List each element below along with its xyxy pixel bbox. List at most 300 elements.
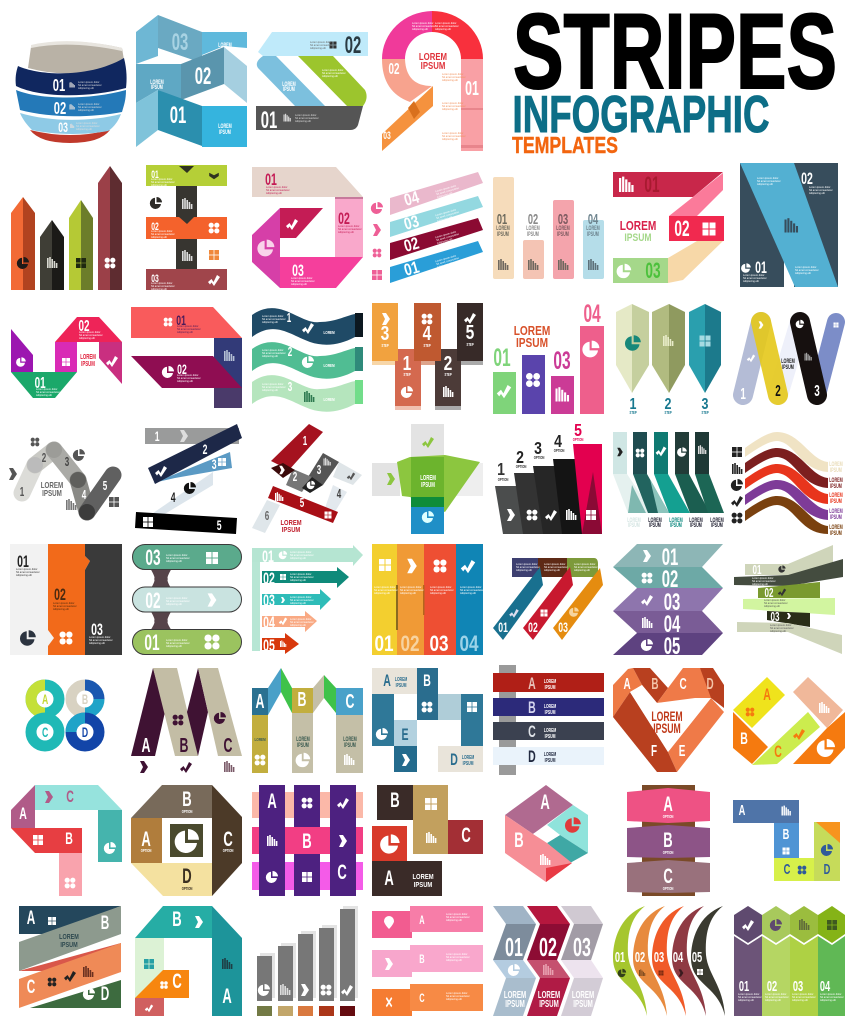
- panel: blue block path: B: [423, 670, 431, 690]
- panel: M stripes: A: [142, 734, 150, 757]
- panel: I-shaped stack: 01: [151, 168, 159, 180]
- panel: orange square ribbon: [733, 677, 845, 765]
- panel: five arrows: 02: [263, 568, 275, 588]
- panel: zigzag capsules: 1: [20, 485, 24, 500]
- panel: M stripes: C: [224, 734, 232, 757]
- panel: folded blue stripes: IPSUM: [151, 84, 163, 91]
- panel: blue block path: E: [401, 724, 409, 744]
- panel: diagonal ABCD bands: LOREM: [59, 933, 79, 941]
- panel: pink origami ring: 02: [338, 208, 350, 228]
- panel: octagon: C: [223, 827, 233, 851]
- panel: folded blue stripes: LOREM: [218, 42, 232, 49]
- panel: three diagonal tabs: 02: [528, 620, 538, 636]
- panel: five arrows: 03: [263, 590, 275, 610]
- panel: zigzag number columns: LOREM: [504, 988, 526, 1000]
- panel: Z ribbon: IPSUM: [624, 232, 652, 244]
- panel: three waves: [252, 308, 363, 412]
- panel: folded blue stripes: 03: [172, 30, 188, 56]
- panel: four colour columns: 04: [459, 632, 479, 657]
- panel: zigzag number columns: 03: [573, 932, 591, 962]
- panel: rounded sticks: 2: [775, 382, 781, 400]
- panel: crimson diagonal blocks: LOREM: [280, 519, 302, 527]
- panel: black steps with crimson: 5: [574, 420, 582, 440]
- panel: five arrows: 01: [262, 546, 274, 566]
- panel: zigzag capsules: [9, 438, 119, 520]
- panel: three shields: STEP: [629, 410, 637, 415]
- panel: folded blue stripes: [136, 15, 247, 147]
- panel: pink tab banners: B: [419, 953, 425, 967]
- panel: five crescents: [613, 906, 725, 1016]
- panel: three shields: STEP: [664, 410, 672, 415]
- panel: three shields: 2: [665, 396, 671, 413]
- panel: three shields: 3: [702, 396, 708, 413]
- panel: blue and lime step blocks: D: [824, 861, 830, 878]
- panel: crimson diagonal blocks: 3: [317, 463, 321, 478]
- panel: four colour columns: 03: [429, 632, 449, 657]
- panel: pink tab banners: A: [419, 914, 425, 928]
- panel: lorem column chart: 01: [493, 344, 511, 372]
- panel: rounded sticks: IPSUM: [782, 364, 794, 371]
- panel: four labelled banners: D: [528, 746, 536, 766]
- title: TEMPLATES: [512, 132, 618, 158]
- panel: striped bowl: 01: [53, 75, 65, 96]
- panel: four labelled banners: [493, 665, 604, 775]
- title: [512, 0, 837, 158]
- panel: teal flowing columns: IPSUM: [670, 522, 682, 529]
- panel: hexagon topped columns: [734, 906, 845, 1016]
- panel: octagon: D: [182, 864, 192, 888]
- panel: black steps with crimson: OPTION: [573, 437, 584, 442]
- panel: origami heart: C: [680, 675, 687, 693]
- panel: U ribbon: 01: [35, 374, 46, 392]
- panel: teal flowing columns: LOREM: [710, 517, 724, 524]
- panel: zigzag capsules: 3: [65, 455, 69, 470]
- panel: pastel bars: LOREM: [556, 225, 570, 232]
- panel: zigzag capsules: IPSUM: [42, 489, 62, 498]
- panel: stacked pink banners: A: [663, 792, 673, 816]
- panel: black steps with crimson: 3: [534, 438, 542, 458]
- panel: five arrows: 05: [263, 635, 275, 655]
- panel: zigzag number columns: 01: [505, 932, 523, 962]
- panel: tan and dark blocks: A: [384, 866, 394, 890]
- panel: number nine ring: [382, 11, 483, 151]
- panel: five crescents: 05: [692, 949, 702, 966]
- panel: black steps with crimson: OPTION: [534, 455, 545, 460]
- panel: overlapping step columns: STEP: [423, 343, 431, 348]
- panel: three waves: 3: [288, 380, 292, 395]
- panel: five arched ribbons: LOREM: [829, 492, 843, 499]
- panel: zigzag number columns: IPSUM: [505, 997, 525, 1009]
- panel: three shields: [616, 304, 721, 415]
- panel: five arrows: 04: [263, 612, 275, 632]
- panel: zigzag number columns: LOREM: [572, 988, 594, 1000]
- panel: rounded sticks: LOREM: [781, 358, 795, 365]
- panel: woven stripes: C: [337, 860, 347, 884]
- panel: pastel bars: 01: [497, 211, 507, 228]
- panel: fanned strips: 02: [765, 586, 773, 601]
- panel: three diagonal tabs: [493, 558, 603, 640]
- panel: slanted navy strips: 2: [203, 442, 207, 458]
- panel: Z ribbon: 02: [674, 216, 690, 241]
- panel: tan and dark blocks: LOREM: [412, 873, 434, 881]
- panel: three waves: 2: [288, 345, 292, 360]
- panel: three diagonal tabs: 03: [558, 620, 568, 636]
- panel: rounded sticks: 1: [740, 385, 746, 403]
- panel: lorem column chart: [493, 300, 604, 414]
- panel: S ribbon: [256, 32, 368, 134]
- panel: pink origami ring: [252, 167, 363, 288]
- panel: four labelled banners: IPSUM: [545, 709, 556, 715]
- panel: blue block path: IPSUM: [396, 682, 407, 688]
- panel: teal flowing columns: LOREM: [669, 517, 683, 524]
- panel: four colour columns: 02: [400, 632, 420, 657]
- panel: teal ribbon with orange: B: [172, 907, 182, 931]
- panel: five arched ribbons: LOREM: [829, 477, 843, 484]
- panel: four labelled banners: LOREM: [544, 751, 556, 757]
- panel: five crescents: 04: [673, 949, 683, 966]
- panel: five chevron rows: 01: [662, 545, 678, 571]
- panel: stacked pink banners: OPTION: [663, 814, 674, 819]
- panel: pastel bars: IPSUM: [557, 231, 569, 238]
- panel: octagon: OPTION: [141, 848, 152, 853]
- panel: green polygon over cross: IPSUM: [421, 482, 435, 489]
- panel: pink tab banners: C: [419, 992, 425, 1006]
- panel: five arched ribbons: IPSUM: [830, 514, 842, 521]
- panel: number nine ring: IPSUM: [421, 60, 445, 71]
- panel: N ribbon: 02: [801, 168, 813, 188]
- panel: three tone columns: 03: [91, 619, 103, 639]
- panel: teal flowing columns: LOREM: [689, 517, 703, 524]
- panel: pastel bars: IPSUM: [527, 231, 539, 238]
- panel: pastel bars: IPSUM: [587, 231, 599, 238]
- panel: U ribbon: IPSUM: [81, 361, 95, 368]
- panel: diagonal numbered bands: 04: [402, 188, 422, 210]
- panel: diagonal numbered bands: 02: [402, 234, 421, 256]
- panel: pastel bars: LOREM: [496, 225, 510, 232]
- panel: pink tab banners: [372, 906, 483, 1016]
- panel: M stripes: [131, 668, 242, 773]
- panel: number nine ring: 03: [383, 129, 391, 141]
- panel: origami heart: E: [679, 742, 685, 760]
- panel: pink tab banners: ✕: [385, 994, 393, 1012]
- panel: pastel bars: 03: [558, 211, 568, 228]
- panel: black steps with crimson: OPTION: [516, 464, 527, 469]
- panel: three shields: 1: [630, 396, 636, 413]
- panel: number nine ring: 01: [465, 77, 479, 100]
- panel: pastel bars: 02: [528, 211, 538, 228]
- panel: five chevron rows: [613, 544, 723, 660]
- panel: zigzag number columns: IPSUM: [573, 997, 593, 1009]
- panel: five arched ribbons: IPSUM: [830, 530, 842, 537]
- panel: origami heart: [613, 668, 724, 772]
- panel: zigzag ABC columns: LOREM: [343, 736, 357, 743]
- panel: crimson diagonal blocks: 5: [300, 496, 304, 511]
- panel: coral and maroon ribbon: 01: [176, 313, 186, 329]
- panel: rounded sticks: 3: [814, 382, 820, 400]
- panel: Z ribbon: LOREM: [620, 219, 656, 233]
- panel: five arched ribbons: LOREM: [829, 524, 843, 531]
- panel: tan and dark blocks: IPSUM: [414, 881, 433, 889]
- panel: crimson diagonal blocks: 1: [303, 434, 307, 449]
- panel: overlapping step columns: [372, 303, 483, 410]
- panel: four labelled banners: LOREM: [544, 703, 556, 709]
- panel: overlapping step columns: 3: [381, 322, 389, 344]
- panel: five crescents: 03: [654, 949, 664, 966]
- panel: lorem column chart: 04: [583, 300, 601, 328]
- panel: green polygon over cross: [372, 424, 483, 534]
- panel: stacked pink banners: B: [663, 828, 673, 852]
- panel: pastel bars: IPSUM: [497, 231, 509, 238]
- panel: slanted navy strips: 4: [171, 490, 176, 506]
- panel: three waves: LOREM: [324, 362, 335, 368]
- panel: four rings: B: [82, 692, 88, 708]
- panel: fanned strips: 03: [771, 610, 779, 625]
- panel: blue block path: A: [383, 670, 391, 690]
- panel: folded blue stripes: 02: [195, 64, 211, 90]
- panel: zigzag capsules: LOREM: [41, 481, 63, 490]
- panel: diagonal ABCD bands: A: [27, 908, 35, 929]
- panel: black steps with crimson: 2: [516, 447, 524, 467]
- panel: teal ribbon with orange: [135, 906, 242, 1016]
- panel: U ribbon: 02: [78, 317, 90, 335]
- panel: M stripes: B: [180, 734, 188, 757]
- panel: octagon: OPTION: [182, 809, 193, 814]
- panel: crimson diagonal blocks: IPSUM: [282, 526, 301, 534]
- panel: four labelled banners: IPSUM: [545, 757, 556, 763]
- panel: three waves: 1: [287, 311, 291, 326]
- panel: four labelled banners: A: [528, 673, 536, 693]
- panel: tan and dark blocks: [372, 785, 483, 896]
- panel: connected pills: 01: [144, 630, 160, 655]
- panel: slanted navy strips: 5: [217, 518, 222, 534]
- panel: teal flowing columns: LOREM: [627, 517, 641, 524]
- panel: overlapping step columns: 4: [423, 322, 431, 344]
- panel: zigzag ABC columns: LOREM: [255, 736, 266, 742]
- panel: four labelled banners: LOREM: [544, 727, 556, 733]
- panel: stacked pink banners: OPTION: [663, 886, 674, 891]
- panel: blue block path: [372, 668, 483, 772]
- panel: four colour columns: [372, 544, 484, 657]
- panel: three tone columns: 02: [54, 584, 66, 604]
- panel: mauve cyan ribbon: B: [65, 828, 73, 848]
- panel: overlapping step columns: 1: [403, 352, 411, 374]
- panel: orange square ribbon: B: [740, 728, 748, 748]
- panel: mauve cyan ribbon: A: [19, 803, 27, 823]
- panel: zigzag number columns: [493, 906, 603, 1016]
- panel: zigzag ABC columns: C: [346, 690, 354, 713]
- panel: zigzag ABC columns: IPSUM: [297, 742, 309, 749]
- panel: crimson diagonal blocks: 4: [337, 487, 341, 502]
- panel: woven stripes: B: [302, 829, 312, 853]
- panel: overlapping step columns: STEP: [403, 372, 411, 377]
- panel: octagon: [131, 785, 242, 896]
- panel: mauve cyan ribbon: [11, 785, 122, 896]
- panel: hexagon topped columns: 04: [820, 978, 830, 995]
- panel: folded blue stripes: 01: [170, 103, 186, 129]
- panel: connected pills: 02: [145, 588, 161, 613]
- panel: I-shaped stack: 02: [151, 220, 159, 232]
- panel: five arched ribbons: IPSUM: [830, 467, 842, 474]
- panel: blue and lime step blocks: A: [739, 802, 745, 819]
- panel: four labelled banners: B: [528, 697, 536, 717]
- panel: hexagon topped columns: 02: [767, 978, 777, 995]
- panel: fanned strips: [734, 545, 843, 654]
- panel: pink origami ring: 01: [265, 169, 277, 189]
- panel: five arched ribbons: IPSUM: [830, 483, 842, 490]
- panel: N ribbon: [740, 163, 838, 287]
- panel: black steps with crimson: [495, 420, 602, 534]
- panel: hexagon: A: [540, 790, 550, 814]
- panel: blue block path: LOREM: [462, 754, 474, 760]
- panel: crimson diagonal blocks: 6: [265, 509, 269, 524]
- panel: diagonal ABCD bands: C: [27, 977, 35, 998]
- panel: overlapping step columns: STEP: [466, 342, 474, 347]
- panel: diagonal numbered bands: 03: [402, 212, 421, 234]
- panel: black steps with crimson: OPTION: [498, 477, 509, 482]
- panel: woven stripes: [252, 785, 363, 896]
- panel: octagon: OPTION: [182, 886, 193, 891]
- panel: five arched ribbons: LOREM: [829, 461, 843, 468]
- panel: S ribbon: 01: [261, 108, 277, 134]
- panel: striped bowl: 02: [54, 98, 66, 119]
- panel: teal flowing columns: IPSUM: [711, 522, 723, 529]
- panel: woven stripes: A: [267, 789, 277, 813]
- panel: origami heart: D: [707, 675, 714, 693]
- panel: teal flowing columns: IPSUM: [690, 522, 702, 529]
- panel: five arched ribbons: [731, 432, 843, 537]
- panel: three diagonal tabs: 01: [498, 620, 508, 636]
- panel: four colour columns: 01: [374, 632, 394, 657]
- panel: folded blue stripes: IPSUM: [219, 129, 231, 136]
- panel: origami heart: A: [624, 675, 631, 693]
- panel: diagonal ABCD bands: [19, 906, 121, 1008]
- panel: coral and maroon ribbon: 02: [177, 362, 187, 378]
- panel: arrow columns: [11, 166, 122, 290]
- panel: blue and lime step blocks: B: [783, 826, 789, 843]
- panel: five arched ribbons: IPSUM: [830, 498, 842, 505]
- panel: five chevron rows: 04: [664, 612, 680, 638]
- panel: origami heart: B: [651, 675, 659, 693]
- panel: S ribbon: LOREM: [282, 81, 296, 88]
- panel: origami heart: LOREM: [651, 709, 683, 725]
- panel: pastel bars: LOREM: [526, 225, 540, 232]
- panel: zigzag capsules: 4: [82, 488, 86, 503]
- panel: diagonal ABCD bands: IPSUM: [60, 941, 78, 949]
- panel: N ribbon: 01: [755, 257, 767, 277]
- panel: zigzag ABC columns: IPSUM: [344, 742, 356, 749]
- panel: zigzag ABC columns: [252, 668, 363, 773]
- panel: five chevron rows: 02: [662, 567, 678, 593]
- panel: tan and dark blocks: B: [390, 788, 400, 812]
- panel: rounded sticks: [740, 320, 838, 403]
- panel: three waves: LOREM: [324, 396, 335, 402]
- panel: number nine ring: LOREM: [419, 51, 447, 62]
- panel: S ribbon: IPSUM: [283, 86, 295, 93]
- panel: blue block path: LOREM: [395, 676, 407, 682]
- panel: lorem column chart: IPSUM: [516, 336, 548, 350]
- panel: four labelled banners: LOREM: [544, 678, 556, 684]
- panel: four rings: C: [42, 725, 49, 741]
- panel: four rings: D: [82, 725, 88, 741]
- panel: zigzag ABC columns: LOREM: [296, 736, 310, 743]
- panel: black steps with crimson: OPTION: [554, 448, 565, 453]
- panel: four labelled banners: IPSUM: [545, 733, 556, 739]
- panel: zigzag capsules: 5: [103, 479, 107, 494]
- panel: hexagon topped columns: 01: [739, 978, 749, 995]
- panel: octagon: B: [182, 787, 192, 811]
- panel: slanted navy strips: 3: [212, 457, 217, 473]
- panel: zigzag number columns: 02: [539, 932, 557, 962]
- panel: connected pills: 03: [145, 545, 161, 570]
- panel: four rings: [31, 685, 99, 746]
- panel: folded blue stripes: LOREM: [218, 123, 232, 130]
- panel: I-shaped stack: 03: [151, 272, 159, 284]
- panel: tan and dark blocks: C: [461, 823, 471, 847]
- panel: U ribbon: [11, 317, 122, 398]
- panel: zigzag number columns: IPSUM: [539, 997, 559, 1009]
- panel: fanned strips: 01: [753, 563, 761, 578]
- panel: three tone columns: [10, 544, 122, 655]
- panel: diagonal ABCD bands: B: [101, 913, 109, 934]
- panel: five arched ribbons: LOREM: [829, 508, 843, 515]
- panel: three shields: STEP: [701, 410, 709, 415]
- panel: stacked pink banners: OPTION: [663, 850, 674, 855]
- panel: zigzag capsules: 2: [42, 451, 46, 466]
- panel: hexagon: [505, 785, 588, 882]
- panel: striped bowl: [16, 41, 127, 143]
- panel: overlapping step columns: STEP: [444, 372, 452, 377]
- panel: slanted navy strips: 1: [155, 429, 160, 445]
- panel: overlapping step columns: 2: [444, 352, 452, 374]
- panel: stacked pink banners: [627, 785, 710, 896]
- panel: crimson diagonal blocks: [252, 424, 362, 534]
- panel: folded blue stripes: LOREM: [150, 79, 164, 86]
- panel: crimson diagonal blocks: 2: [293, 470, 297, 485]
- panel: blue block path: IPSUM: [463, 760, 474, 766]
- panel: teal flowing columns: IPSUM: [628, 522, 640, 529]
- panel: diagonal numbered bands: 01: [402, 258, 422, 280]
- panel: pastel bars: 04: [588, 211, 598, 228]
- panel: Z ribbon: 03: [645, 258, 661, 283]
- panel: octagon: A: [141, 827, 151, 851]
- panel: five chevron rows: 05: [664, 634, 680, 660]
- panel: four rings: A: [42, 692, 49, 708]
- panel: pink origami ring: 03: [292, 260, 304, 280]
- panel: four labelled banners: C: [528, 721, 536, 741]
- panel: three tone columns: 01: [17, 551, 29, 571]
- panel: number nine ring: 02: [388, 60, 400, 78]
- panel: five chevron rows: 03: [664, 590, 680, 616]
- panel: teal flowing columns: [613, 432, 724, 529]
- panel: hexagon: B: [514, 828, 524, 852]
- panel: orange square ribbon: C: [774, 741, 782, 761]
- panel: pastel bars: [493, 177, 604, 279]
- panel: three waves: LOREM: [324, 329, 335, 335]
- panel: blue block path: D: [450, 749, 458, 769]
- panel: zigzag number columns: LOREM: [538, 988, 560, 1000]
- panel: diagonal ABCD bands: D: [101, 984, 109, 1005]
- panel: Z ribbon: 01: [644, 172, 660, 197]
- panel: I-shaped stack: [146, 165, 227, 291]
- panel: five crescents: 02: [635, 949, 645, 966]
- panel: teal ribbon with orange: C: [172, 969, 182, 993]
- panel: grey bar chart: [257, 906, 358, 1016]
- panel: stacked pink banners: C: [663, 864, 673, 888]
- panel: coral and maroon ribbon: [131, 307, 242, 408]
- panel: orange square ribbon: A: [763, 684, 771, 704]
- panel: origami heart: F: [651, 742, 657, 760]
- panel: zigzag ABC columns: A: [256, 690, 264, 713]
